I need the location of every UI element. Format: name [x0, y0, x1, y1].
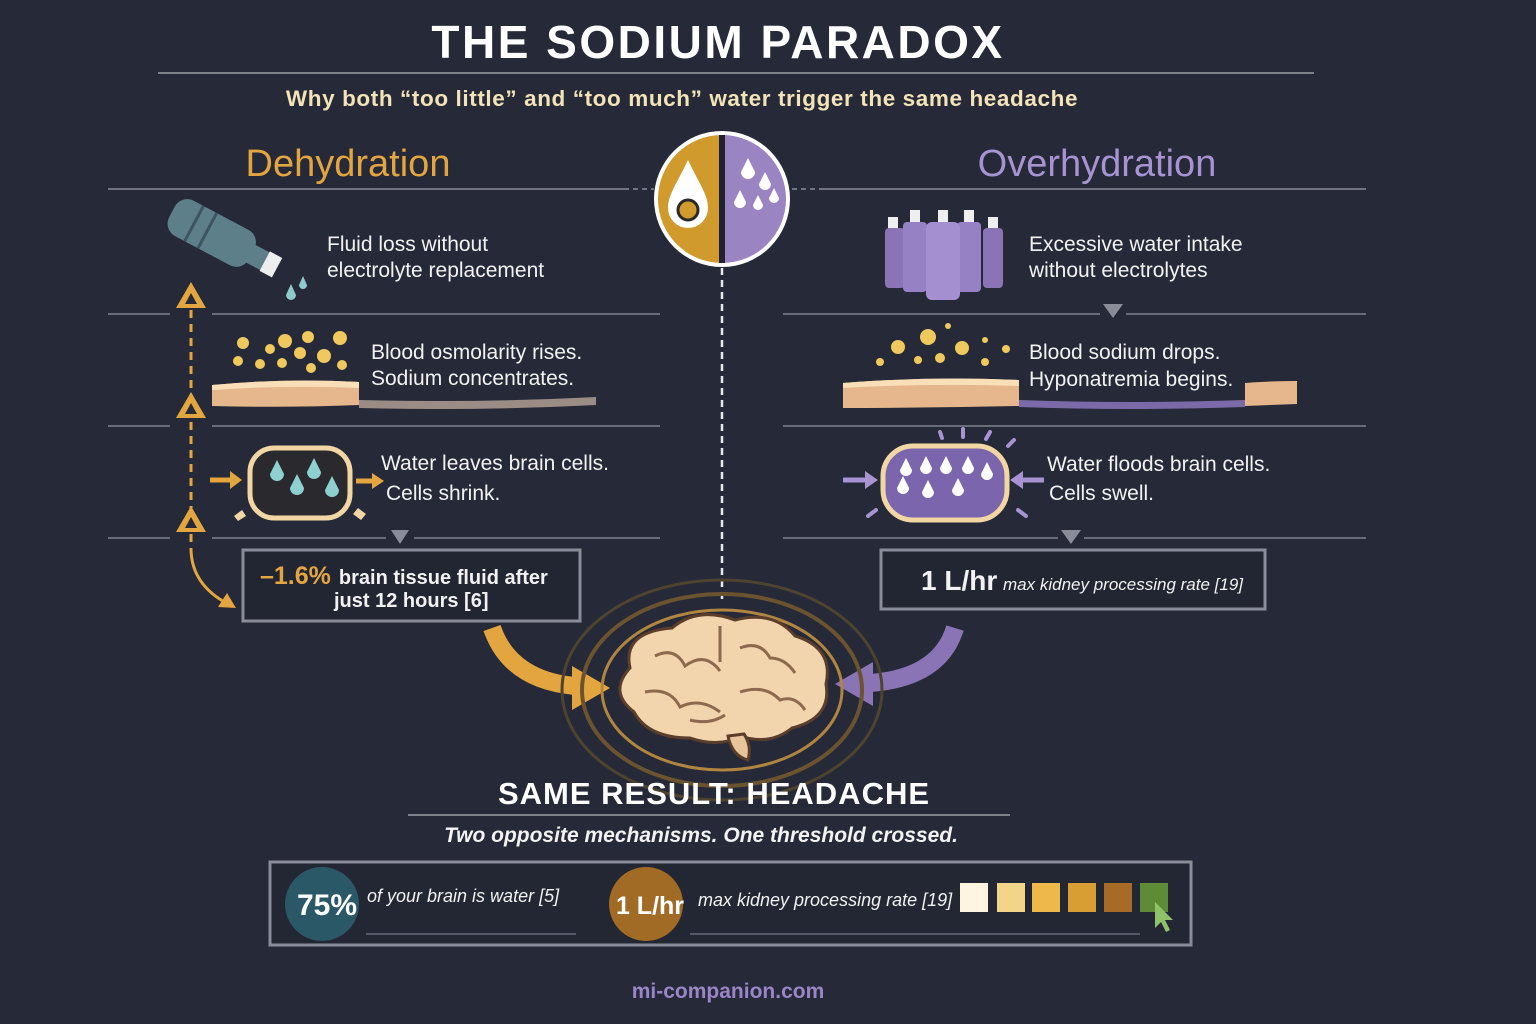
- text: blood osmolarity: Sodium concentrates.: [371, 367, 574, 390]
- stat: 75%: of your brain is water [5]: [367, 886, 560, 906]
- text: fluid loss: Fluid loss without: [327, 233, 488, 256]
- text: fluid loss: [327, 233, 544, 282]
- arrow: overhydration to brain: [835, 628, 955, 706]
- stat: 75%: 75%: [297, 889, 357, 922]
- icon: swelling cell: [843, 429, 1044, 520]
- text: water leaves: Cells shrink.: [386, 482, 500, 505]
- icon: center split drop circle: [654, 131, 790, 267]
- stat: 1 L/hr: 1 L/hr: [616, 892, 684, 920]
- arrow: dehydration to brain: [492, 628, 610, 710]
- text: water leaves: Water leaves brain cells.: [381, 452, 609, 475]
- heading: Dehydration: Dehydration: [246, 143, 450, 185]
- text: water leaves: [381, 452, 609, 505]
- text: excessive intake: [1028, 233, 1243, 282]
- urine color scale: [960, 883, 1173, 932]
- callout: -1.6% stat: just 12 hours [6]: [333, 590, 488, 612]
- row separators: [108, 314, 1366, 538]
- text: water floods: Water floods brain cells.: [1047, 453, 1270, 476]
- stat: 1 L/hr: [609, 867, 1140, 941]
- text: water floods: Cells swell.: [1049, 482, 1154, 505]
- text: blood osmolarity: Blood osmolarity rises.: [371, 341, 582, 364]
- callout: 1 L/hr: [881, 550, 1265, 609]
- callout: 1 L/hr: 1 L/hr: [921, 565, 997, 596]
- callout: -1.6% stat: brain tissue fluid after: [339, 567, 548, 589]
- panel: bottom stats: [270, 862, 1191, 945]
- callout: 1 L/hr: max kidney processing rate [19]: [1003, 575, 1244, 594]
- heading: Overhydration: Overhydration: [978, 143, 1216, 185]
- footer url: mi-companion.com: [632, 980, 824, 1003]
- icon: pouring bottle: [163, 194, 307, 300]
- text: excessive intake: Excessive water intake: [1029, 233, 1243, 256]
- icon: dehydration escalation arrow: [176, 282, 236, 608]
- text: blood osmolarity: [371, 341, 582, 390]
- stat: 75%: [285, 867, 576, 941]
- text: water floods: [1047, 453, 1270, 505]
- text: sodium drops: [1029, 341, 1233, 391]
- text: fluid loss: electrolyte replacement: [327, 259, 544, 282]
- callout: -1.6% stat: –1.6%: [260, 562, 331, 590]
- text: sodium drops: Hyponatremia begins.: [1029, 368, 1233, 391]
- title: THE SODIUM PARADOX: [431, 16, 1005, 68]
- icon: water bottles: [885, 210, 1003, 300]
- subtitle: Why both “too little” and “too much” water trigger the same headache: [286, 86, 1078, 111]
- callout: -1.6% stat: [243, 550, 580, 621]
- stat: 1 L/hr: max kidney processing rate [19]: [698, 890, 953, 910]
- text: excessive intake: without electrolytes: [1028, 259, 1208, 282]
- icon: brain with rings: [562, 580, 882, 800]
- icon: diluted sodium: [843, 323, 1297, 409]
- text: sodium drops: Blood sodium drops.: [1029, 341, 1220, 364]
- icon: sodium particles rising: [212, 331, 596, 409]
- heading: same result: SAME RESULT: HEADACHE: [498, 776, 930, 811]
- icon: shrinking cell: [210, 448, 384, 521]
- center dashed line: [721, 268, 723, 600]
- text: tagline: Two opposite mechanisms. One threshold crossed.: [444, 824, 958, 847]
